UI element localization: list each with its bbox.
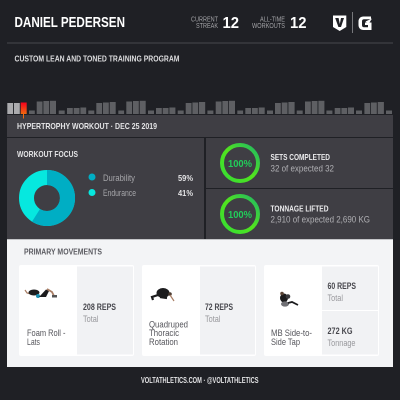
card: MB side-to-side tap (264, 265, 379, 356)
icon: Gatorade G logo (358, 16, 372, 30)
card: quadruped thoracic rotation: Rotation (149, 337, 178, 348)
stat: all-time workouts: WORKOUTS (252, 21, 285, 30)
text: quadruped reps: 72 REPS (205, 302, 233, 312)
stat: all-time workouts: 12 (290, 15, 307, 32)
card: MB side-to-side tap: Side Tap (271, 337, 300, 348)
card: foam roll lats: Lats (27, 337, 40, 348)
text: MB reps: 60 REPS (328, 281, 356, 291)
legend: durability (88, 173, 193, 183)
legend: durability: Durability (103, 173, 135, 183)
panel: workout header band (7, 115, 393, 137)
card: quadruped thoracic rotation: Thoracic (149, 328, 179, 339)
donut chart (26, 170, 75, 226)
panel: tonnage lifted: 2,910 of expected 2,690 KG (270, 214, 370, 224)
text: MB tonnage: 272 KG (328, 326, 353, 336)
heading: workout focus: WORKOUT FOCUS (17, 149, 78, 159)
card: quadruped thoracic rotation (142, 265, 256, 356)
stat: current streak: CURRENT (191, 14, 218, 24)
stat: current streak (191, 14, 239, 32)
stat: all-time workouts: ALL-TIME (260, 14, 285, 24)
stat: current streak: STREAK (196, 21, 218, 30)
panel: tonnage lifted (206, 189, 393, 239)
gauge: tonnage 100%: 100% (228, 209, 253, 221)
chart: workout calendar bars (7, 101, 392, 114)
text: MB name: MB Side-to- (271, 328, 312, 339)
card: quadruped thoracic rotation: Total (205, 314, 220, 324)
icon: Volt shield logo (333, 16, 346, 31)
legend: endurance: Endurance (103, 188, 136, 198)
legend: endurance (88, 188, 193, 198)
panel: tonnage lifted: TONNAGE LIFTED (270, 204, 328, 214)
panel: primary movements (7, 239, 393, 367)
text: foam roll name: Foam Roll - (27, 328, 66, 339)
legend: durability: 59% (178, 173, 193, 183)
panel: sets completed (206, 138, 393, 188)
card: foam roll lats (19, 265, 134, 356)
panel: sets completed: 32 of expected 32 (270, 164, 334, 174)
panel: workout header band: HYPERTROPHY WORKOUT · DEC 25 2019 (17, 121, 157, 131)
panel: sets completed: SETS COMPLETED (270, 152, 330, 162)
footer: VOLTATHLETICS.COM · @VOLTATHLETICS (141, 376, 259, 385)
text: quadruped name: Quadruped (149, 320, 188, 330)
marker: current workout pointer (23, 114, 24, 118)
gauge: sets 100%: 100% (228, 158, 253, 170)
stat: all-time workouts (252, 14, 307, 32)
gauge: sets 100% (222, 145, 258, 181)
icon: medicine ball figure (280, 292, 298, 307)
card: foam roll lats: Total (83, 314, 98, 324)
heading: primary movements: PRIMARY MOVEMENTS (24, 246, 102, 256)
panel: workout focus (7, 138, 204, 239)
legend: endurance: 41% (178, 188, 193, 198)
header: athlete name: DANIEL PEDERSEN (14, 14, 125, 31)
card: MB side-to-side tap: Total (328, 293, 343, 303)
icon: quadruped figure (152, 288, 174, 301)
icon: foam roll figure (25, 289, 57, 298)
text: foam roll reps: 208 REPS (83, 302, 116, 312)
stat: current streak: 12 (222, 15, 239, 32)
program title: CUSTOM LEAN AND TONED TRAINING PROGRAM (14, 54, 180, 64)
gauge: tonnage 100% (222, 196, 258, 232)
card: MB side-to-side tap: Tonnage (328, 338, 356, 348)
